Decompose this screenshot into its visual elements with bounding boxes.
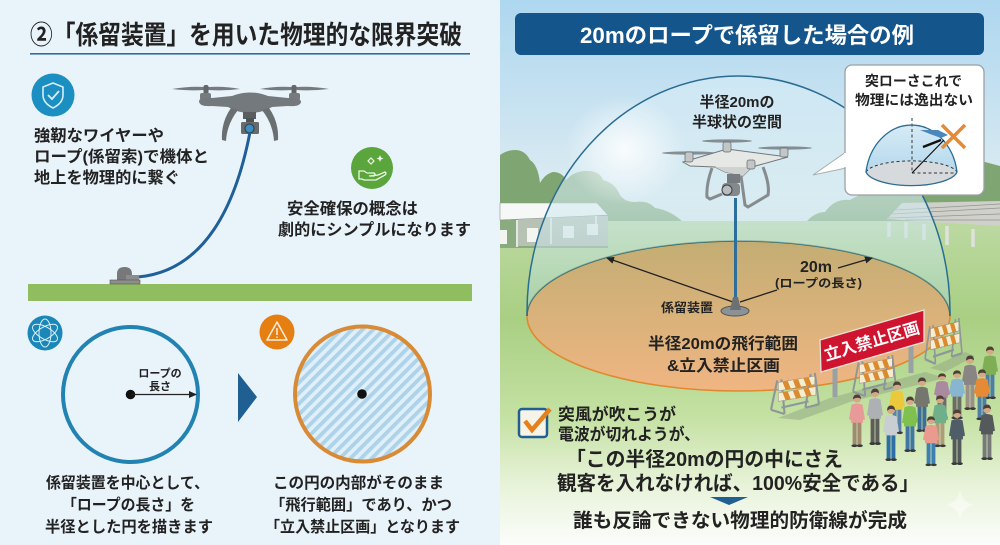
icon: shield — [32, 74, 74, 116]
tether device — [721, 297, 749, 316]
label: tether device: 係留装置 — [661, 300, 713, 315]
text block: wire description: ロープ(係留索)で機体と — [34, 147, 209, 166]
label: hemisphere: 半球状の空間 — [692, 113, 782, 131]
sky — [500, 0, 1000, 225]
trees — [500, 150, 1000, 222]
barricade 1 — [771, 373, 819, 414]
callout text: 物理には逸出ない — [855, 92, 973, 108]
text block: draw circle: 係留装置を中心として、 — [46, 474, 209, 492]
text block: safety concept — [278, 199, 471, 239]
label: rope length: 長さ — [149, 380, 171, 393]
building left — [500, 203, 608, 248]
icon: sparkle — [945, 490, 975, 520]
sign poles — [835, 345, 911, 397]
label: 20m rope length — [775, 259, 862, 290]
panel: right scene — [500, 0, 1000, 545]
ground circle — [527, 241, 950, 391]
label: rope length: ロープの — [138, 367, 182, 380]
arrow: radius left — [607, 258, 733, 302]
bleachers right — [887, 201, 1000, 247]
drone on tether — [662, 139, 812, 207]
text block: key statement: 「この半径20mの円の中にさえ — [566, 448, 843, 471]
label: hemisphere: 半径20mの — [699, 93, 775, 111]
crowd of spectators — [849, 346, 998, 466]
sign: no entry zone: 立入禁止区画 — [822, 318, 922, 365]
header banner: 20mのロープで係留した場合の例 — [580, 23, 914, 48]
illustration: tethered drone — [110, 85, 329, 284]
text block: flight range: この円の内部がそのまま — [273, 473, 444, 492]
arrow: down to conclusion — [710, 497, 748, 505]
icon: hand with sparkles — [351, 147, 393, 189]
label: flight range: &立入禁止区画 — [667, 357, 780, 375]
callout text — [855, 73, 973, 108]
label: flight range: 半径20mの飛行範囲 — [648, 334, 798, 353]
tether rope — [138, 132, 250, 277]
header banner — [515, 13, 984, 55]
text block: draw circle — [45, 474, 213, 536]
callout text: 突ローさこれで — [865, 73, 962, 89]
text block: draw circle: 「ロープの長さ」を — [62, 496, 195, 514]
barricade 3 — [925, 318, 962, 364]
grass field — [500, 221, 1000, 545]
text block: wire description: 強靭なワイヤーや — [34, 127, 164, 145]
drone — [172, 85, 329, 141]
text block: flight range: 「飛行範囲」であり、かつ — [270, 495, 452, 514]
text block: wire description — [34, 127, 209, 187]
text block: flight range: 「立入禁止区画」となります — [265, 518, 460, 536]
callout: physically cannot escape — [813, 65, 984, 195]
text block: wind and radio — [558, 404, 700, 444]
label: flight range — [648, 334, 798, 375]
icon: atom — [28, 316, 62, 350]
label: 20m rope length: (ロープの長さ) — [775, 277, 862, 290]
text block: safety concept: 劇的にシンプルになります — [278, 221, 471, 239]
arrow: radius right — [740, 258, 872, 302]
label: rope length — [138, 367, 182, 393]
heading: left title: ②「係留装置」を用いた物理的な限界突破 — [30, 20, 462, 50]
text block: wind and radio: 電波が切れようが、 — [558, 424, 700, 444]
panel: left background — [0, 0, 500, 545]
text block: wind and radio: 突風が吹こうが — [558, 404, 677, 424]
icon: checkbox — [519, 409, 550, 437]
text block: key statement — [557, 448, 919, 495]
tether line — [734, 198, 737, 300]
text block: key statement: 観客を入れなければ、100%安全である」 — [557, 472, 919, 495]
text block: flight range — [265, 473, 460, 536]
mini dome — [866, 118, 965, 186]
diagram: circle with rope radius — [63, 327, 198, 462]
label: 20m rope length: 20m — [800, 259, 832, 276]
title underline — [30, 53, 470, 55]
barricade 2 — [853, 355, 896, 396]
ground bar — [28, 284, 472, 301]
ground shadows — [778, 352, 975, 420]
diagram: hatched circle — [295, 326, 430, 462]
tether base — [110, 267, 140, 284]
icon: warning — [260, 314, 294, 350]
arrow: left to right — [238, 373, 257, 422]
text block: safety concept: 安全確保の概念は — [287, 199, 418, 218]
dome — [527, 76, 950, 316]
text block: conclusion: 誰も反論できない物理的防衛線が完成 — [573, 509, 907, 532]
text block: wire description: 地上を物理的に繋ぐ — [34, 169, 180, 187]
text block: draw circle: 半径とした円を描きます — [45, 518, 213, 536]
label: hemisphere — [692, 93, 782, 131]
